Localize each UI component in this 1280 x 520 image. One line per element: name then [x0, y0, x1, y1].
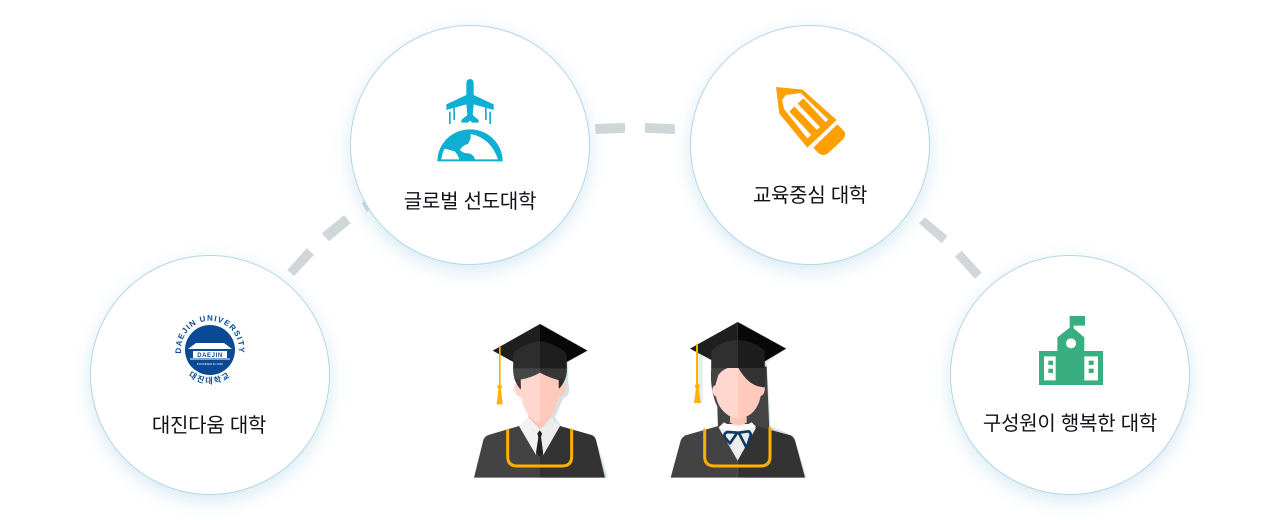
label: 글로벌 선도대학: 글로벌 선도대학: [404, 191, 536, 213]
illustration: female graduate: [670, 322, 806, 478]
icon: university seal: FOUNDED IN 1991: [197, 362, 223, 366]
icon: pencil: [776, 87, 846, 155]
illustration: male graduate: [474, 324, 608, 478]
label: 대진다움 대학: 대진다움 대학: [152, 415, 266, 437]
icon: university seal: [175, 315, 244, 384]
icon: airplane over globe: [437, 79, 503, 162]
icon: university seal: DAEJIN: [197, 353, 223, 359]
panel: 교육중심 대학: [690, 25, 930, 265]
icon: university seal: 대진대학교: [189, 371, 230, 384]
panel: 구성원이 행복한 대학: [950, 255, 1190, 495]
icon: university seal: DAEJIN UNIVERSITY: [175, 315, 244, 353]
panel: 대진다움 대학: [90, 255, 330, 495]
label: 구성원이 행복한 대학: 구성원이 행복한 대학: [983, 413, 1157, 435]
label: 교육중심 대학: 교육중심 대학: [753, 185, 867, 207]
icon: school building: [1039, 316, 1103, 385]
panel: 글로벌 선도대학: [350, 25, 590, 265]
